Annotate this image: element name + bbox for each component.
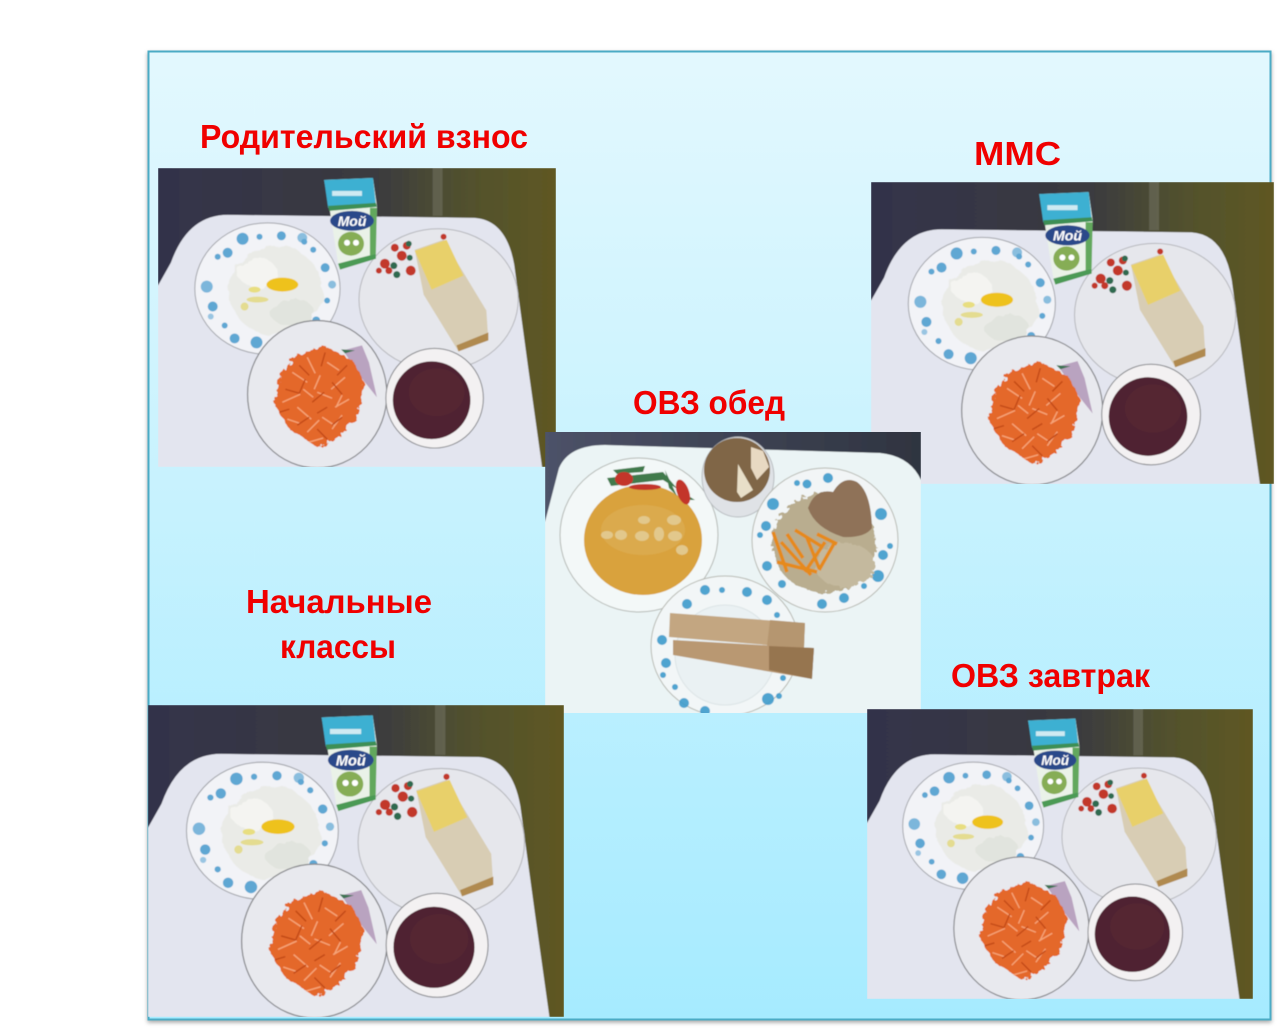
heading: ОВЗ обед: ОВЗ обед [633, 384, 785, 421]
photo: ММС breakfast tray [871, 182, 1274, 485]
photo: ОВЗ завтрак breakfast tray [867, 709, 1253, 1000]
heading: Начальные классы [246, 583, 432, 665]
photo: Начальные классы breakfast tray [148, 705, 564, 1018]
heading: ОВЗ завтрак: ОВЗ завтрак [951, 657, 1150, 694]
heading: Начальные классы: классы [280, 628, 396, 665]
heading: Начальные классы: Начальные [246, 583, 432, 620]
photo: ОВЗ обед lunch tray [545, 430, 921, 716]
heading: ММС: ММС [974, 135, 1061, 172]
heading: Родительский взнос: Родительский взнос [200, 118, 528, 155]
photo: Родительский взнос breakfast tray [158, 168, 556, 468]
